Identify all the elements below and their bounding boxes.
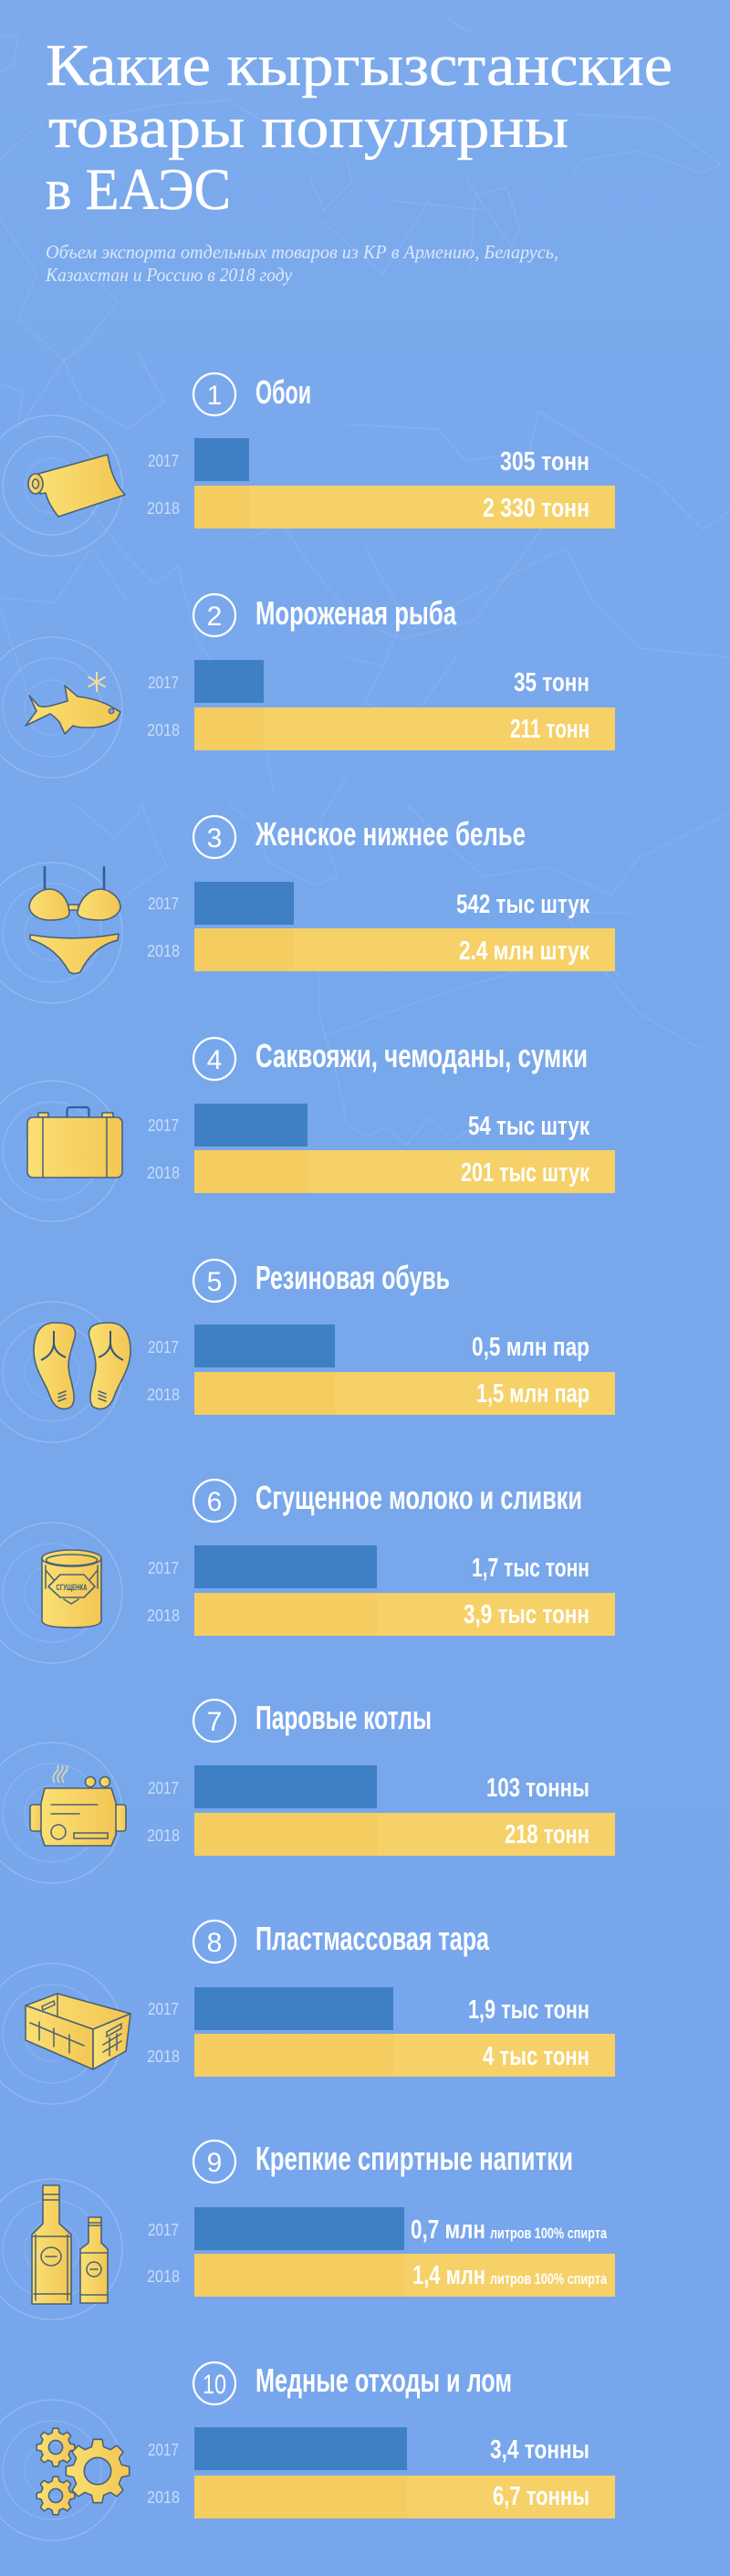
- panel: 6 condensed milk: [0, 1479, 615, 1663]
- bars 6: 2018: [147, 1607, 180, 1625]
- panel: 9 spirits: [0, 2140, 615, 2319]
- bars 3: 2018: [147, 942, 180, 960]
- panel: 1 wallpaper: [0, 373, 615, 556]
- icon: condensed milk can: СГУЩЕНКА: [57, 1583, 88, 1592]
- icon: steam boiler: [30, 1765, 126, 1846]
- heading 6: Сгущенное молоко и сливки: [256, 1479, 582, 1516]
- number 8: 8: [207, 1928, 222, 1958]
- icon: plastic crate: [26, 1994, 130, 2069]
- number 7: 7: [207, 1707, 222, 1737]
- heading 2: Мороженая рыба: [256, 594, 457, 632]
- title: Какие кыргызстанские: [46, 33, 673, 99]
- rings 6: [0, 1523, 122, 1663]
- bars 9: литров 100% спирта: [490, 2270, 607, 2288]
- number 6: 6: [207, 1487, 222, 1517]
- bars 6: [147, 1545, 615, 1636]
- number 3: [193, 816, 235, 858]
- bars 4: 54 тыс штук: [468, 1112, 589, 1141]
- title: [46, 33, 673, 223]
- subtitle: Объем экспорта отдельных товаров из КР в Армению, Беларусь,: [46, 241, 558, 263]
- number 10: [193, 2362, 235, 2404]
- bars 8: 2017: [148, 2000, 179, 2018]
- panel: 2 frozen fish: [0, 594, 615, 778]
- number 1: 1: [207, 381, 222, 411]
- bars 4: 2018: [147, 1164, 180, 1182]
- heading 8: Пластмассовая тара: [256, 1920, 490, 1957]
- icon: gears: [36, 2428, 130, 2515]
- icon: flip-flops: [34, 1323, 130, 1408]
- number 3: 3: [207, 823, 222, 853]
- bars 9: 2018: [147, 2267, 180, 2286]
- bars 8: 4 тыс тонн: [483, 2042, 589, 2071]
- background map contours: [0, 18, 730, 1146]
- panel: 5 rubber footwear: [0, 1259, 615, 1442]
- bars 5: 2017: [148, 1338, 179, 1356]
- bars 2: [147, 660, 615, 750]
- bars 9: 2017: [148, 2221, 179, 2239]
- subtitle: Казахстан и Россию в 2018 году: [45, 264, 293, 286]
- number 10: 10: [203, 2370, 226, 2400]
- rings 1: [0, 415, 122, 556]
- bars 10: 3,4 тонны: [490, 2435, 589, 2465]
- heading 10: Медные отходы и лом: [256, 2361, 512, 2399]
- icon: bottles: [32, 2185, 108, 2304]
- number 2: 2: [207, 602, 222, 632]
- bars 7: 103 тонны: [486, 1774, 589, 1803]
- rings 3: [0, 863, 122, 1003]
- icon: fish with snowflake: [26, 672, 120, 734]
- number 2: [193, 594, 235, 636]
- rings 4: [0, 1081, 122, 1221]
- bars 10: 2017: [148, 2441, 179, 2459]
- panel: 10 copper scrap: [0, 2361, 615, 2540]
- bars 1: 305 тонн: [500, 447, 589, 476]
- bars 8: 1,9 тыс тонн: [468, 1995, 589, 2025]
- icon: condensed milk can: [42, 1550, 101, 1628]
- rings 9: [0, 2179, 122, 2319]
- bars 4: 2017: [148, 1116, 179, 1135]
- bars 5: 2018: [147, 1386, 180, 1404]
- number 9: 9: [207, 2148, 222, 2178]
- panel: 3 underwear: [0, 815, 615, 1003]
- bars 9: 1,4 млн: [412, 2261, 485, 2290]
- bars 8: 2018: [147, 2047, 180, 2066]
- bars 6: 3,9 тыс тонн: [464, 1600, 589, 1629]
- number 1: [193, 373, 235, 415]
- bars 10: 6,7 тонны: [493, 2482, 589, 2511]
- bars 2: 35 тонн: [514, 668, 589, 697]
- rings 8: [0, 1963, 122, 2104]
- number 7: [193, 1700, 235, 1742]
- panel: 7 steam boilers: [0, 1699, 615, 1883]
- bars 3: 2.4 млн штук: [459, 937, 589, 966]
- icon: suitcase: [27, 1107, 122, 1178]
- bars 3: [147, 882, 615, 971]
- bars 7: [147, 1765, 615, 1856]
- number 9: [193, 2141, 235, 2183]
- panel: 4 suitcases: [0, 1037, 615, 1221]
- bars 7: 218 тонн: [505, 1820, 589, 1849]
- bars 3: 2017: [148, 895, 179, 913]
- bars 8: [147, 1987, 615, 2077]
- heading 1: Обои: [256, 373, 311, 411]
- bars 5: 0,5 млн пар: [472, 1333, 589, 1362]
- bars 9: 0,7 млн: [411, 2215, 485, 2245]
- number 5: [193, 1260, 235, 1302]
- number 8: [193, 1921, 235, 1963]
- bars 5: 1,5 млн пар: [476, 1379, 589, 1408]
- bars 7: 2018: [147, 1827, 180, 1845]
- bars 2: 2018: [147, 721, 180, 739]
- rings 2: [0, 637, 122, 778]
- title: в ЕАЭС: [46, 157, 231, 223]
- rings 5: [0, 1302, 122, 1442]
- panel: 8 plastic containers: [0, 1920, 615, 2104]
- heading 4: Саквояжи, чемоданы, сумки: [256, 1037, 588, 1074]
- heading 9: Крепкие спиртные напитки: [256, 2140, 573, 2177]
- rings 7: [0, 1743, 122, 1883]
- bars 9: литров 100% спирта: [490, 2225, 607, 2242]
- bars 2: 2017: [148, 674, 179, 692]
- number 4: 4: [207, 1045, 222, 1075]
- number 5: 5: [207, 1267, 222, 1297]
- bars 1: 2018: [147, 499, 180, 518]
- bars 5: [147, 1325, 615, 1415]
- bars 1: 2 330 тонн: [483, 494, 589, 523]
- bars 4: 201 тыс штук: [461, 1158, 589, 1188]
- bars 6: 2017: [148, 1559, 179, 1577]
- heading 7: Паровые котлы: [256, 1699, 432, 1736]
- heading 5: Резиновая обувь: [256, 1259, 450, 1296]
- bars 2: 211 тонн: [510, 715, 589, 744]
- title: товары популярны: [48, 95, 568, 161]
- bars 4: [147, 1104, 615, 1193]
- number 6: [193, 1480, 235, 1522]
- heading 3: Женское нижнее белье: [255, 815, 526, 853]
- bars 10: 2018: [147, 2488, 180, 2507]
- bars 9: [147, 2207, 615, 2297]
- bars 6: 1,7 тыс тонн: [472, 1554, 589, 1583]
- rings 10: [0, 2400, 122, 2540]
- icon: bra and panties: [29, 866, 120, 973]
- bars 1: 2017: [148, 452, 179, 470]
- icon: wallpaper roll: [28, 455, 125, 517]
- bars 1: [147, 438, 615, 529]
- bars 10: [147, 2427, 615, 2518]
- subtitle: [45, 241, 558, 286]
- number 4: [193, 1038, 235, 1080]
- bars 3: 542 тыс штук: [456, 890, 589, 919]
- bars 7: 2017: [148, 1779, 179, 1797]
